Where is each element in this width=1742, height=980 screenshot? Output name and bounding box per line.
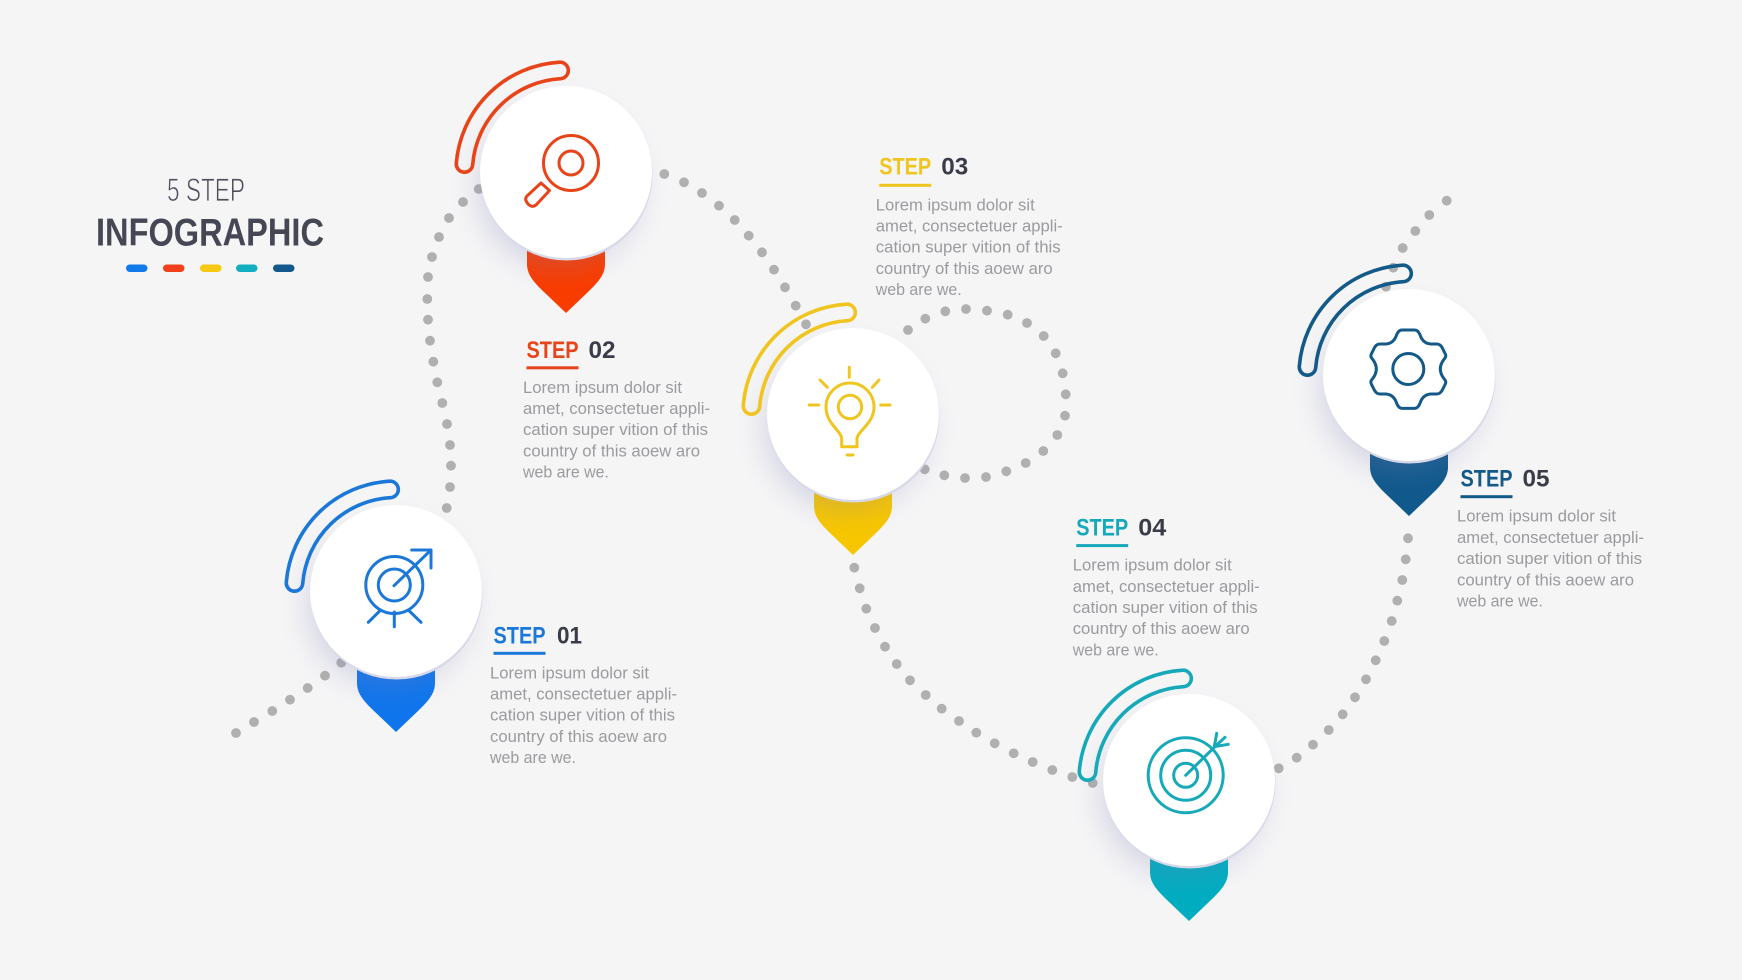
step 4 arc	[1079, 670, 1191, 780]
step 4 description: amet, consectetuer appli-	[1073, 577, 1260, 596]
step 3 description: amet, consectetuer appli-	[876, 217, 1063, 236]
title	[96, 172, 324, 254]
step 4 description: country of this aoew aro	[1073, 619, 1250, 638]
step 2 description: web are we.	[522, 463, 609, 482]
step 4 heading	[1076, 515, 1167, 547]
step 5 heading: 05	[1522, 466, 1550, 493]
step 3 circle	[767, 328, 939, 500]
step 2 description: Lorem ipsum dolor sit	[523, 378, 682, 397]
step 3 arc	[743, 304, 855, 414]
step 2 circle	[480, 86, 652, 258]
step 1 heading	[494, 622, 582, 655]
step 5 description: web are we.	[1456, 592, 1543, 611]
step 4 circle	[1103, 694, 1275, 866]
step 4 marker	[1079, 670, 1276, 921]
step 3 heading	[879, 153, 968, 187]
step 5 pin	[1370, 451, 1448, 516]
step 3 heading: 03	[941, 153, 968, 180]
step 1 heading: STEP	[494, 622, 546, 649]
step 4 description: cation super vition of this	[1073, 598, 1258, 617]
icon: target with arrow	[366, 550, 431, 627]
step 3 description: country of this aoew aro	[876, 259, 1053, 278]
step 3 text block	[875, 153, 1063, 299]
icon: magnifier	[526, 136, 598, 206]
step 2 arc	[456, 62, 568, 172]
title: 5 STEP	[167, 172, 245, 208]
step 5 circle	[1323, 289, 1495, 461]
icon: gear	[1371, 330, 1446, 408]
step 5 description: Lorem ipsum dolor sit	[1457, 507, 1616, 526]
step 2 text block	[522, 337, 710, 482]
title: INFOGRAPHIC	[96, 212, 324, 254]
step 2 marker	[456, 62, 652, 313]
step 4 heading: 04	[1138, 515, 1167, 542]
step 3 pin	[814, 490, 892, 555]
step 5 marker	[1299, 265, 1496, 516]
icon: light bulb	[809, 367, 890, 455]
step 1 marker	[286, 481, 482, 732]
dotted route line	[231, 169, 1452, 788]
step 1 description: cation super vition of this	[490, 706, 675, 725]
step 5 description: amet, consectetuer appli-	[1457, 528, 1644, 547]
step 3 description: Lorem ipsum dolor sit	[876, 195, 1035, 214]
step 1 pin	[357, 667, 435, 732]
step 3 description: cation super vition of this	[876, 238, 1061, 257]
step 4 description: web are we.	[1072, 640, 1159, 659]
step 2 heading: STEP	[526, 337, 578, 364]
step 1 description: country of this aoew aro	[490, 727, 667, 746]
step 5 heading: STEP	[1460, 466, 1512, 493]
step 2 heading	[526, 337, 616, 369]
step 4 pin	[1150, 856, 1228, 921]
step 2 pin	[527, 248, 605, 313]
step 4 heading: STEP	[1076, 515, 1128, 542]
step 5 heading	[1460, 466, 1550, 498]
step 1 circle	[310, 505, 482, 677]
step 1 description: web are we.	[489, 748, 576, 767]
step 5 text block	[1456, 466, 1644, 610]
step 1 arc	[286, 481, 398, 591]
step 3 marker	[743, 304, 940, 555]
step 1 description: Lorem ipsum dolor sit	[490, 663, 649, 682]
step 4 text block	[1072, 515, 1260, 659]
step 3 description: web are we.	[875, 280, 962, 299]
colour legend dashes	[126, 264, 294, 272]
step 1 text block	[489, 622, 677, 767]
step 2 description: cation super vition of this	[523, 420, 708, 439]
step 1 description: amet, consectetuer appli-	[490, 684, 677, 703]
step 2 description: country of this aoew aro	[523, 441, 700, 460]
icon: bullseye	[1148, 733, 1228, 813]
step 1 heading: 01	[557, 622, 582, 649]
step 4 description: Lorem ipsum dolor sit	[1073, 556, 1232, 575]
step 3 heading: STEP	[879, 153, 931, 180]
step 5 description: country of this aoew aro	[1457, 570, 1634, 589]
step 2 heading: 02	[588, 337, 616, 364]
step 5 arc	[1299, 265, 1411, 375]
step 2 description: amet, consectetuer appli-	[523, 399, 710, 418]
step 5 description: cation super vition of this	[1457, 549, 1642, 568]
